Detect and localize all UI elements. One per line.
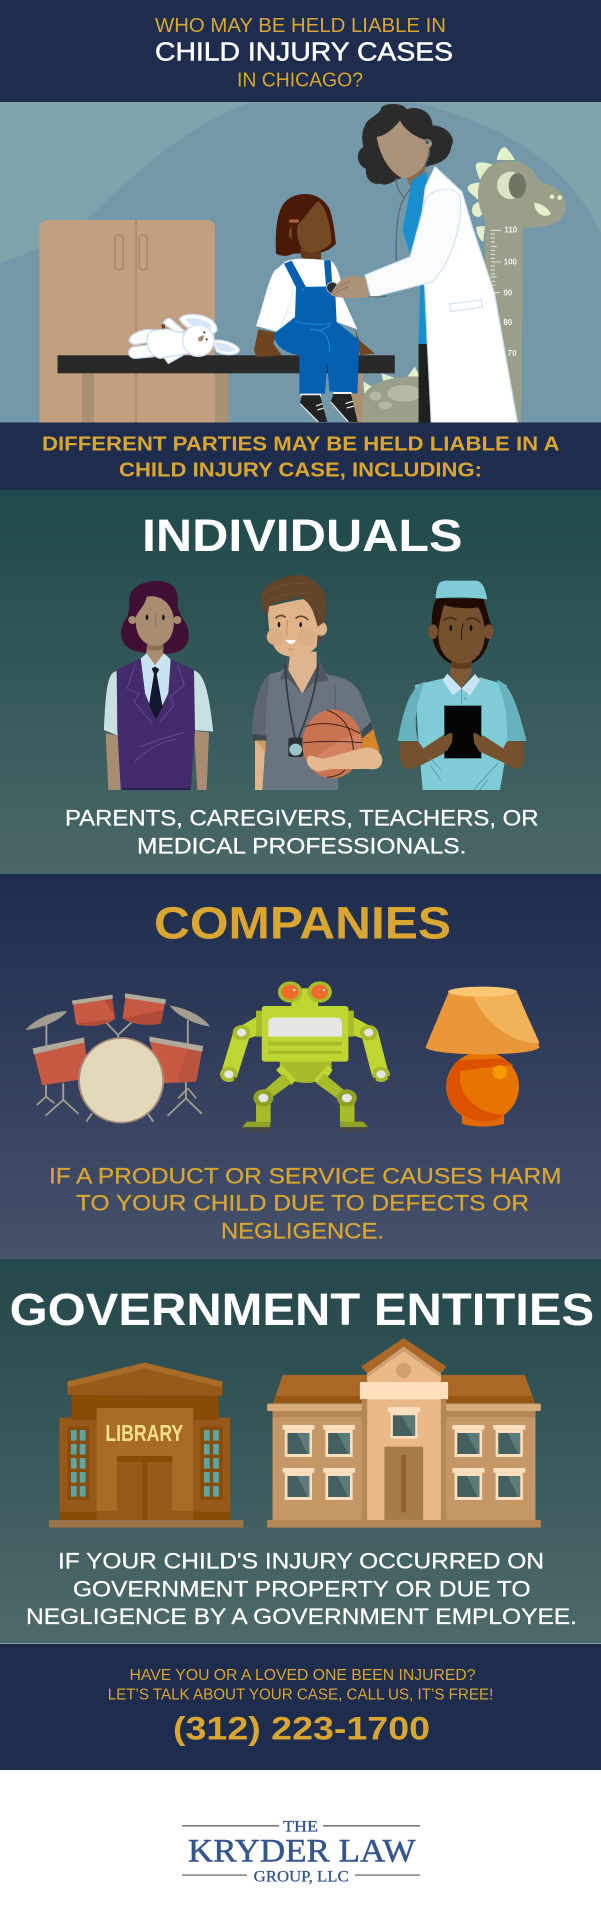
- doctor head and hair: [358, 104, 453, 265]
- product illustrations: [25, 981, 540, 1132]
- sub-heading line 2: CHILD INJURY CASE, INCLUDING:: [119, 459, 482, 482]
- government description: IF YOUR CHILD'S INJURY OCCURRED ON: [58, 1549, 544, 1574]
- person: coach with basketball: [252, 575, 382, 790]
- government heading: GOVERNMENT ENTITIES: [10, 1284, 594, 1335]
- call to action footer: [0, 1644, 601, 1770]
- law firm logo: GROUP, LLC: [254, 1868, 349, 1885]
- companies description: NEGLIGENCE.: [221, 1218, 384, 1243]
- growth chart dinosaur: 90: [503, 288, 513, 297]
- icon: drum kit: [25, 993, 210, 1123]
- individuals description: PARENTS, CAREGIVERS, TEACHERS, OR: [65, 805, 538, 830]
- phone number: (312) 223-1700: [173, 1710, 430, 1746]
- growth chart dinosaur: 110: [504, 226, 518, 235]
- person: nurse with tablet: [398, 581, 527, 790]
- header banner: [0, 0, 601, 102]
- person: woman in vest: [104, 581, 213, 790]
- doctor: [327, 104, 517, 423]
- stuffed bunny: [129, 314, 239, 363]
- growth chart dinosaur: [468, 147, 566, 422]
- call to action text: LET’S TALK ABOUT YOUR CASE, CALL US, IT’S FREE!: [108, 1686, 493, 1703]
- panel: government entities: [0, 1259, 601, 1643]
- government description: [26, 1549, 577, 1629]
- doctor coat and scrubs: [365, 167, 517, 423]
- title line 2: CHILD INJURY CASES: [155, 37, 453, 67]
- law firm logo: KRYDER LAW: [188, 1833, 416, 1869]
- title line 1: WHO MAY BE HELD LIABLE IN: [155, 14, 446, 37]
- exam table: [57, 355, 395, 423]
- icon: robot toy: [216, 981, 394, 1132]
- companies description: [49, 1163, 562, 1243]
- panel: individuals: [0, 490, 601, 874]
- hero illustration: doctor examining child: [0, 102, 601, 423]
- sub-heading banner: [0, 422, 601, 490]
- growth chart dinosaur: 70: [508, 349, 517, 358]
- call to action text: HAVE YOU OR A LOVED ONE BEEN INJURED?: [130, 1667, 476, 1684]
- companies heading: COMPANIES: [154, 897, 451, 948]
- individuals description: MEDICAL PROFESSIONALS.: [137, 833, 466, 858]
- call to action text: [108, 1667, 493, 1703]
- title line 3: IN CHICAGO?: [237, 69, 363, 92]
- stethoscope and hand: [327, 275, 387, 298]
- small dinosaur toy: [363, 367, 425, 423]
- growth chart dinosaur: 100: [504, 258, 518, 267]
- individuals heading: INDIVIDUALS: [142, 510, 462, 561]
- companies description: IF A PRODUCT OR SERVICE CAUSES HARM: [49, 1163, 562, 1188]
- sub-heading line 1: DIFFERENT PARTIES MAY BE HELD LIABLE IN A: [42, 433, 560, 456]
- growth chart dinosaur: 80: [503, 318, 513, 327]
- law firm logo: THE: [283, 1819, 318, 1836]
- icon: table lamp: [425, 987, 540, 1127]
- child patient: [254, 194, 375, 422]
- panel: companies: [0, 874, 601, 1259]
- library sign: LIBRARY: [105, 1421, 183, 1447]
- government description: NEGLIGENCE BY A GOVERNMENT EMPLOYEE.: [26, 1604, 577, 1629]
- companies description: TO YOUR CHILD DUE TO DEFECTS OR: [76, 1191, 529, 1216]
- icon: library: [49, 1363, 243, 1528]
- law firm logo: [182, 1819, 420, 1885]
- icon: government building: [267, 1338, 541, 1528]
- government description: GOVERNMENT PROPERTY OR DUE TO: [73, 1577, 530, 1602]
- individuals description: [65, 805, 538, 858]
- building illustrations: [49, 1338, 541, 1528]
- cabinet: [39, 220, 215, 423]
